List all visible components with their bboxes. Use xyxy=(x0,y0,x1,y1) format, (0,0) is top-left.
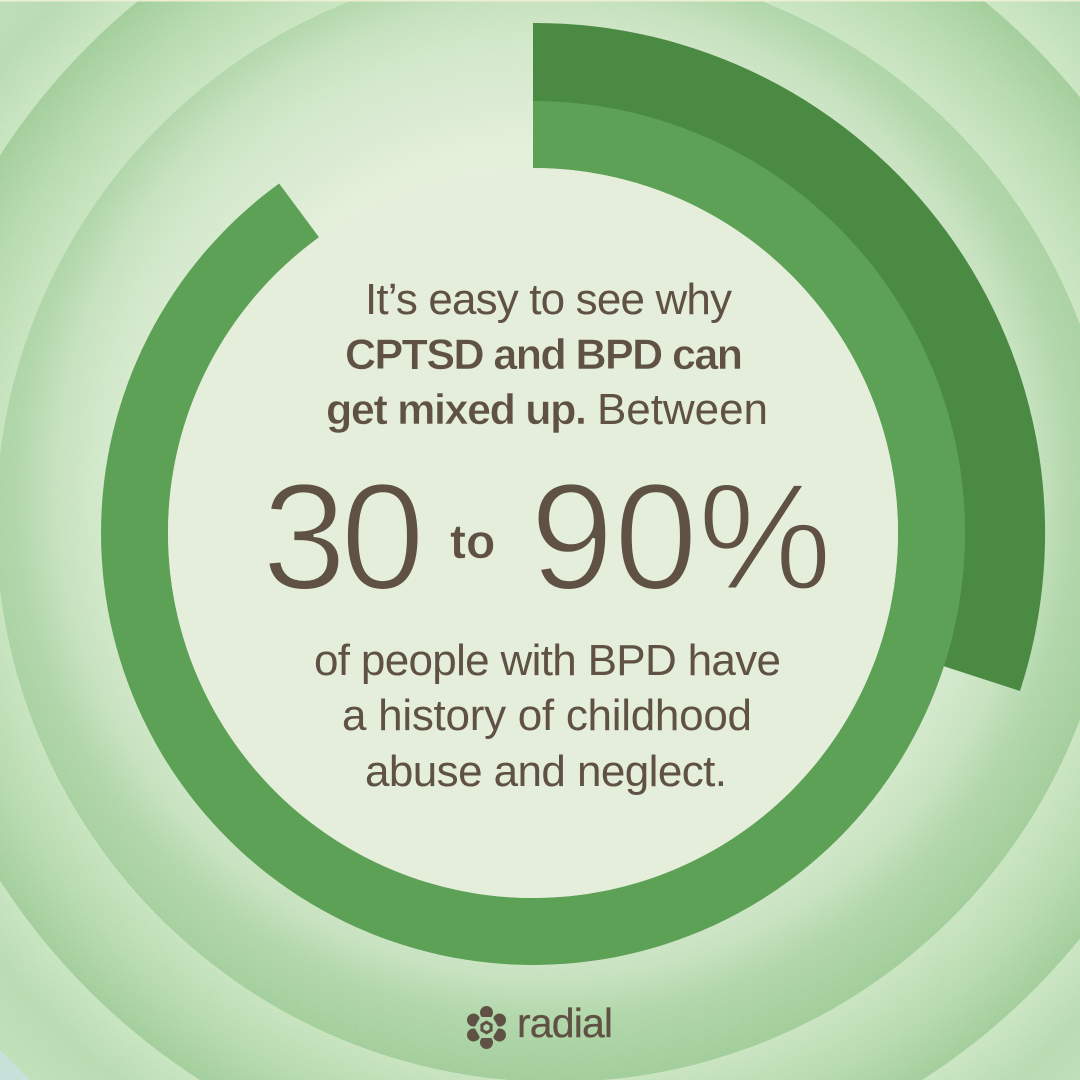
text block: intro: get mixed up. xyxy=(326,386,587,434)
icon: flower xyxy=(465,1006,508,1049)
wordmark: radial xyxy=(517,1000,613,1046)
text block: conclusion: of people with BPD have xyxy=(314,636,781,685)
statistic: 30 to 90%: 90% xyxy=(530,452,832,622)
text block: intro: CPTSD and BPD can xyxy=(345,331,743,379)
text block: intro: Between xyxy=(597,385,768,434)
text block: conclusion xyxy=(314,636,781,796)
chart: medium green 90% arc xyxy=(101,101,965,965)
text block: conclusion: a history of childhood xyxy=(342,691,752,740)
chart: dark green 30% arc xyxy=(533,23,1045,691)
text block: intro xyxy=(326,275,768,434)
statistic: 30 to 90%: to xyxy=(450,516,495,569)
text block: conclusion: abuse and neglect. xyxy=(365,747,727,796)
statistic: 30 to 90%: 30 xyxy=(262,452,425,622)
logo: radial xyxy=(465,1000,613,1049)
text block: intro: It’s easy to see why xyxy=(365,275,732,324)
center circle xyxy=(168,168,898,898)
statistic: 30 to 90% xyxy=(262,452,832,622)
